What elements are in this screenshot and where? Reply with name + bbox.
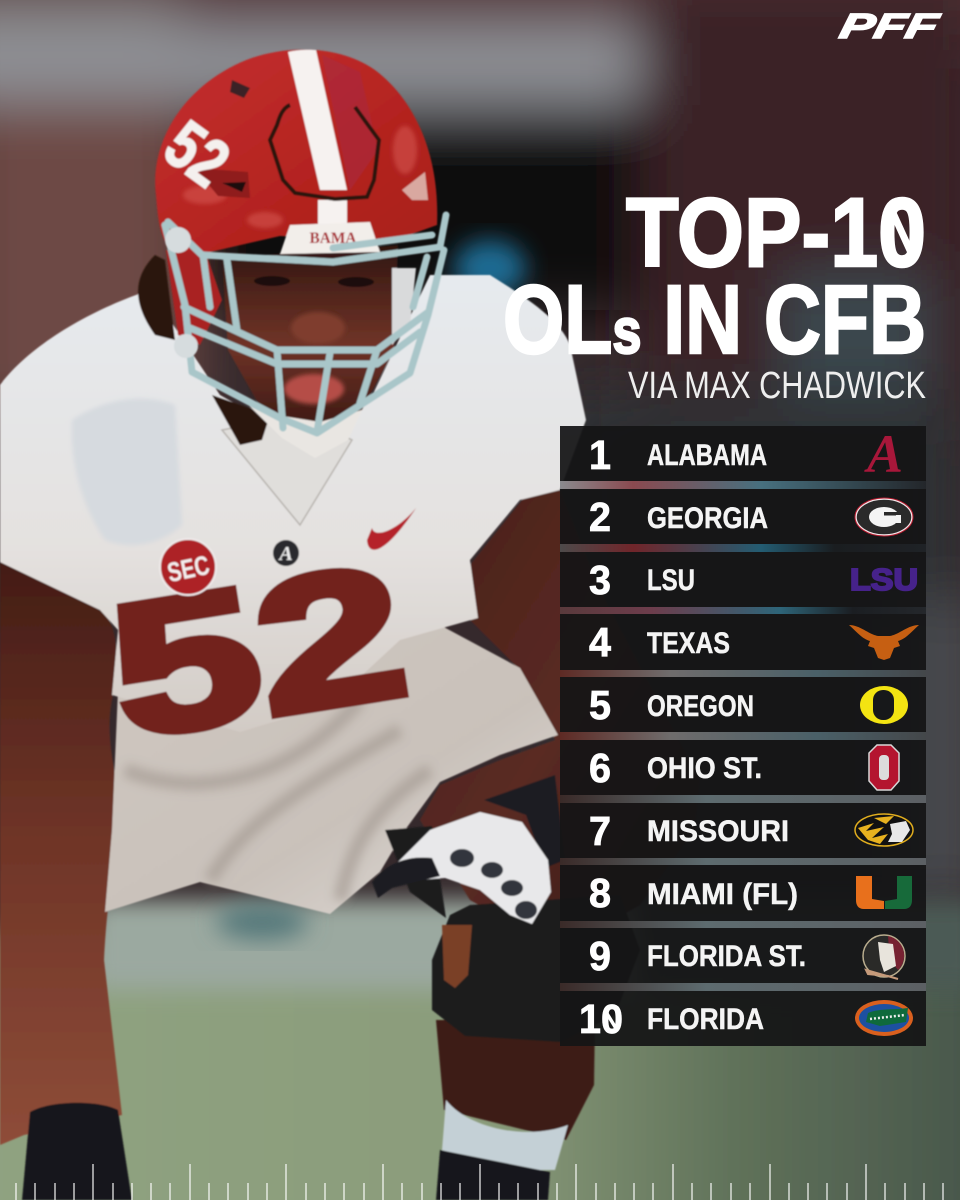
- wrist wrap: [22, 1103, 132, 1200]
- logo: alabama: A: [864, 424, 903, 484]
- row 9 florida state: [560, 928, 926, 983]
- row 10 florida: FLORIDA: [647, 1003, 764, 1036]
- bama plate: [280, 222, 380, 254]
- row 2 georgia: 2: [589, 494, 611, 540]
- row 2 georgia: [560, 489, 926, 544]
- row 3 lsu: 3: [589, 557, 611, 603]
- logo: florida: [855, 1000, 913, 1036]
- helmet vent outline: [270, 105, 379, 199]
- bama plate: BAMA: [310, 230, 357, 247]
- helmet shell: [155, 49, 437, 252]
- row 7 missouri: MISSOURI: [647, 815, 789, 848]
- jersey number: 52: [98, 524, 419, 778]
- far arm and thigh: [420, 490, 700, 950]
- row 6 ohio state: 6: [589, 745, 611, 791]
- row 6 ohio state: [560, 740, 926, 795]
- yard-line ticks: [16, 1164, 943, 1200]
- collar logo: A: [277, 543, 293, 565]
- title: [503, 178, 926, 374]
- row 2 georgia: GEORGIA: [647, 502, 768, 535]
- panel: ranking list: [560, 424, 926, 1046]
- knee brace: [432, 895, 640, 1042]
- row 7 missouri: 7: [589, 808, 611, 854]
- row 4 texas: [560, 614, 926, 670]
- collar logo: [273, 540, 299, 566]
- PFF logo: PFF: [836, 7, 944, 46]
- row 4 texas: 4: [589, 619, 611, 665]
- logo: lsu: LSU: [850, 562, 918, 597]
- row 1 alabama: ALABAMA: [647, 439, 767, 472]
- pants: [105, 625, 558, 914]
- jersey: [0, 275, 586, 732]
- row 5 oregon: [560, 677, 926, 732]
- row 4 texas: TEXAS: [647, 627, 730, 660]
- helmet stripe: [288, 50, 347, 190]
- sleeve cap: [72, 399, 182, 545]
- SEC patch: [160, 539, 216, 595]
- wrist tape: [484, 775, 565, 868]
- row 8 miami: 8: [589, 870, 611, 916]
- logo: oregon: [860, 686, 908, 724]
- nike swoosh: [367, 508, 416, 550]
- pants folds: [125, 700, 430, 900]
- row 3 lsu: LSU: [647, 564, 695, 597]
- side vents: [195, 168, 250, 198]
- helmet highlights: [183, 126, 417, 228]
- facemask: [165, 215, 446, 433]
- left arm: [0, 560, 122, 1145]
- logo: georgia: [855, 498, 913, 536]
- row 3 lsu: [560, 552, 926, 607]
- row 7 missouri: [560, 803, 926, 858]
- row 5 oregon: 5: [589, 682, 611, 728]
- row 1 alabama: [560, 424, 926, 484]
- logo: florida state: [863, 935, 905, 979]
- black sock: [436, 1150, 550, 1200]
- thumb strap: [385, 826, 446, 918]
- row 10 florida: [560, 991, 926, 1046]
- lower leg: [436, 1020, 595, 1140]
- logo: texas: [849, 625, 919, 660]
- logo: ohio state: [869, 745, 899, 790]
- cheek pad: [392, 268, 416, 345]
- logo: missouri: [855, 814, 913, 846]
- red side flap: [166, 250, 222, 345]
- row 8 miami: [560, 865, 926, 921]
- undershirt collar: [222, 415, 352, 525]
- row 5 oregon: OREGON: [647, 690, 754, 723]
- glove: [398, 812, 551, 924]
- chin strap: [235, 392, 362, 458]
- face: [222, 245, 398, 425]
- logo: miami: [856, 876, 912, 909]
- neck: [212, 395, 270, 445]
- hanging towel: [442, 925, 472, 988]
- hair: [138, 255, 175, 340]
- row 9 florida state: FLORIDA ST.: [647, 940, 806, 973]
- row 1 alabama: 1: [589, 432, 611, 478]
- row 8 miami: MIAMI (FL): [647, 878, 798, 911]
- row 9 florida state: 9: [589, 933, 611, 979]
- player photo: [0, 49, 700, 1200]
- row 6 ohio state: OHIO ST.: [647, 752, 762, 785]
- SEC patch: SEC: [165, 550, 212, 588]
- mask clips: [165, 227, 198, 358]
- row 10 florida: 10: [579, 996, 623, 1042]
- title: TOP-10: [626, 178, 926, 287]
- white sock: [442, 1100, 568, 1170]
- helmet number: 52: [151, 106, 243, 202]
